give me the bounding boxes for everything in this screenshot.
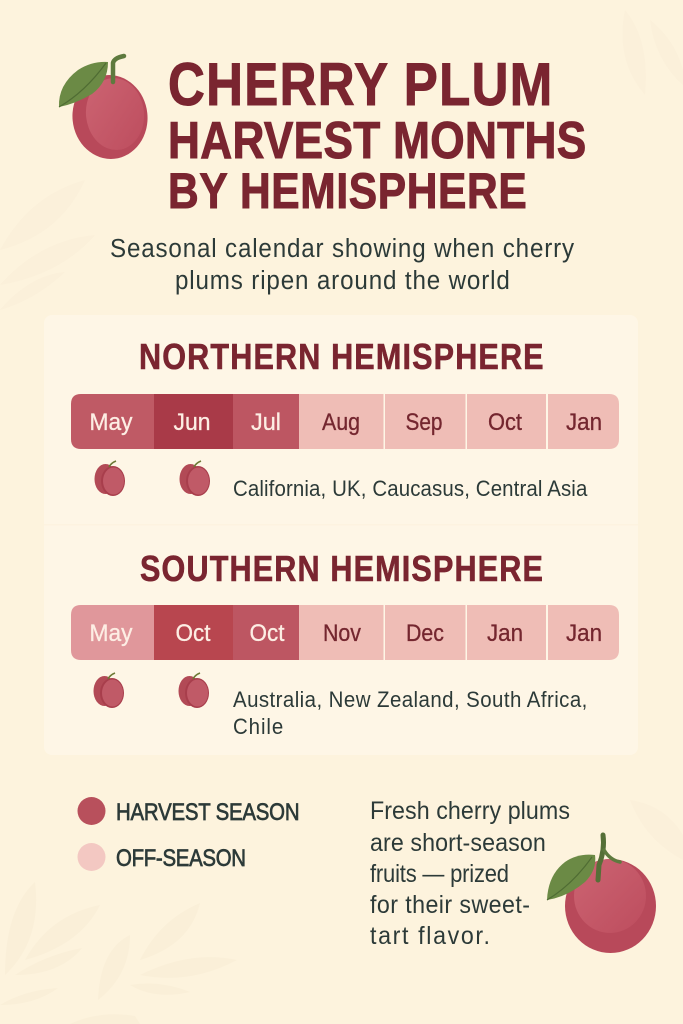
- callout text: Fresh cherry plums: [370, 797, 570, 825]
- title: [168, 51, 586, 219]
- callout text: [370, 797, 570, 950]
- calendar: southern months: Jan: [566, 620, 602, 647]
- callout text: tart flavor.: [370, 922, 490, 950]
- icon: southern plum May: [94, 673, 124, 708]
- text: southern regions: [233, 687, 587, 739]
- calendar: northern months: Sep: [406, 409, 442, 436]
- text: southern regions: Australia, New Zealand, South Africa,: [233, 687, 587, 712]
- calendar: southern months: Nov: [323, 620, 361, 647]
- legend swatch: off-season: [78, 843, 106, 871]
- heading: northern hemisphere: NORTHERN HEMISPHERE: [139, 338, 544, 378]
- icon: cherry plum with leaf (bottom): [547, 835, 656, 953]
- icon: northern plum June: [180, 461, 210, 496]
- title: CHERRY PLUM: [168, 51, 552, 118]
- decorative leaves: top right: [622, 10, 683, 95]
- callout text: for their sweet-: [370, 891, 530, 919]
- calendar: northern months: Jan: [566, 409, 602, 436]
- callout text: fruits — prized: [370, 860, 509, 887]
- legend: [78, 797, 300, 871]
- legend label: off-season: OFF-SEASON: [116, 844, 246, 871]
- calendar: northern months: Jun: [174, 409, 210, 436]
- calendar: northern months: Oct: [488, 409, 522, 436]
- subtitle: plums ripen around the world: [175, 266, 510, 295]
- title: BY HEMISPHERE: [168, 163, 527, 219]
- decorative leaves: bottom left: [0, 882, 237, 1024]
- callout text: are short-season: [370, 829, 546, 857]
- decorative leaves: right lower: [630, 800, 683, 860]
- text: northern regions: California, UK, Caucasus, Central Asia: [233, 476, 588, 501]
- calendar: northern months: [71, 394, 619, 449]
- decorative leaves: left middle: [0, 180, 95, 310]
- subtitle: [110, 234, 575, 295]
- icon: southern plum October: [178, 673, 209, 708]
- heading: southern hemisphere: SOUTHERN HEMISPHERE: [140, 550, 543, 590]
- panel: hemispheres: [44, 315, 638, 755]
- legend swatch: harvest season: [78, 797, 106, 825]
- calendar: southern months: [71, 605, 619, 660]
- subtitle: Seasonal calendar showing when cherry: [110, 234, 575, 263]
- calendar: southern months: Oct: [250, 620, 285, 647]
- icon: northern plum May: [94, 461, 125, 496]
- calendar: northern months: May: [90, 409, 132, 436]
- icon: cherry plum with leaf (top): [59, 56, 152, 163]
- calendar: southern months: Oct: [176, 620, 211, 647]
- calendar: southern months: Dec: [406, 620, 444, 647]
- text: southern regions: Chile: [233, 714, 283, 739]
- title: HARVEST MONTHS: [168, 112, 586, 170]
- legend label: harvest season: HARVEST SEASON: [116, 798, 300, 825]
- calendar: northern months: Aug: [322, 409, 360, 436]
- calendar: northern months: Jul: [251, 409, 281, 436]
- calendar: southern months: May: [90, 620, 132, 647]
- calendar: southern months: Jan: [487, 620, 523, 647]
